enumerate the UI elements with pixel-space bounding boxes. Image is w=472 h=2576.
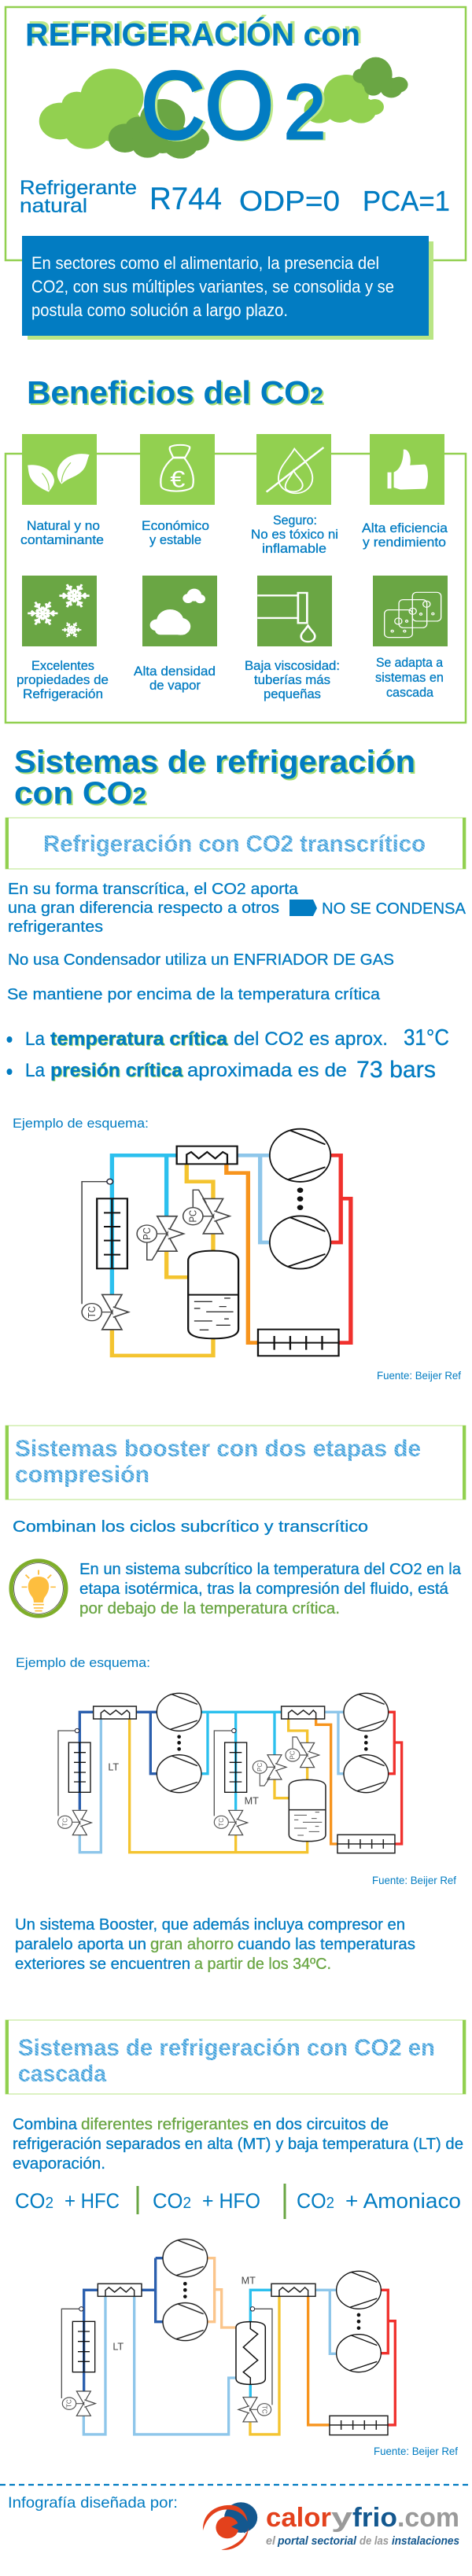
benefit labels: inflamable [262,541,326,556]
logo tagline: portal sectorial [277,2534,357,2548]
benefit labels: Económico [142,518,209,533]
heading box: cascade: Sistemas de refrigeración con CO2 en [18,2035,435,2061]
critical values list: del CO2 es aprox. [234,1029,388,1050]
icon: money bag: € [170,466,185,492]
icon: vapour clouds [150,589,205,635]
text: cascade description: evaporación. [13,2155,105,2173]
benefit labels: Refrigeración [23,686,103,701]
valves: PC [256,1763,264,1772]
text: transcritical explanation: refrigerantes [8,918,103,936]
logo wordmark: .com [397,2503,459,2533]
heading: systems: con CO 2 [14,776,146,811]
icon: thumbs up [388,449,428,490]
icon: cascade units [385,592,441,638]
icon: light bulb [11,1561,66,1616]
heat exchangers [94,1706,325,1719]
text: transcritical explanation: Se mantiene por encima de la temperatura crítica [7,986,381,1003]
logo: caloryfrio [203,2502,459,2550]
text: cascade description [13,2116,463,2173]
benefit labels: y rendimiento [363,535,446,550]
text: cascade description: Combina [13,2116,78,2133]
benefit labels: Baja viscosidad: [245,658,340,673]
receiver [188,1251,238,1338]
labels LT MT [108,1762,259,1807]
critical values list: temperatura crítica [50,1029,228,1050]
labels LT MT: MT [245,1796,259,1807]
valves: TC [61,1818,68,1827]
credit text: Infografía diseñada por: [8,2495,178,2512]
heading box: cascade [6,2020,466,2094]
icon: money bag [160,445,194,492]
text: booster savings: a partir de los 34ºC. [194,1956,331,1973]
benefit labels: tuberías más [254,672,330,687]
valves: PC [141,1227,153,1240]
heading box: cascade: cascada [18,2061,106,2087]
text: transcritical explanation [7,881,466,1003]
text: transcritical explanation: una gran diferencia respecto a otros [8,900,279,917]
heading box: booster: Sistemas booster con dos etapas de [15,1436,421,1462]
labels LT MT: MT [242,2275,256,2286]
text: subcritical note: por debajo de la temperatura crítica. [79,1600,340,1617]
valves: TC [218,1818,225,1827]
text: transcritical explanation: En su forma transcrítica, el CO2 aporta [8,881,299,898]
valves [82,1190,230,1330]
critical values list [6,1025,449,1083]
text: booster savings: paralelo aporta un [15,1936,146,1953]
logo icon [203,2502,257,2550]
benefit labels: No es tóxico ni [251,527,338,542]
text: cascade description: diferentes refrigerantes [81,2116,249,2133]
critical values list: presión crítica [50,1060,183,1081]
evaporator [72,2321,95,2372]
evaporator [97,1198,127,1268]
heading box: booster [6,1426,466,1500]
benefit labels: Seguro: [273,513,317,528]
refrigerant pairs: + HFO [202,2189,260,2213]
refrigerant pairs: CO2 [153,2189,191,2213]
title: REFRIGERACIÓN con [25,17,360,53]
diagram: booster [58,1693,402,1853]
refrigerant pairs: CO2 [15,2189,53,2213]
panel: header [6,7,466,340]
diagram: cascade [61,2239,395,2435]
text: booster savings: exteriores se encuentren [15,1956,190,1973]
logo tagline [266,2534,459,2548]
text: subcritical note: En un sistema subcrítico la temperatura del CO2 en la [79,1561,462,1578]
source 1: Fuente: Beijer Ref [377,1369,461,1382]
text: cycles: Combinan los ciclos subcrítico y transcrítico [13,1518,368,1536]
evaporators [68,1742,247,1792]
title: CO2: 2 [284,68,326,155]
logo tagline: el [266,2534,276,2548]
icon: snowflakes [28,583,90,638]
valves [58,1737,319,1835]
gas cooler [330,2416,388,2435]
compressors [163,2239,381,2372]
labels LT MT: LT [112,2341,124,2352]
refrigerant facts: PCA=1 [363,185,450,217]
icon: no flame [267,447,323,493]
text: subcritical note: etapa isotérmica, tras la compresión del fluido, está [79,1581,449,1598]
compressors [157,1693,389,1793]
title: CO2: CO [141,52,274,159]
source 2: Fuente: Beijer Ref [372,1874,456,1886]
icon: pipe with drop [257,593,315,642]
critical values list: La [25,1029,46,1050]
caption: example 1: Ejemplo de esquema: [13,1116,149,1131]
refrigerant facts [20,177,450,217]
logo wordmark [266,2503,459,2533]
heading box: transcritical [6,818,466,869]
critical values list: aproximada es de [187,1060,347,1081]
critical values list: 73 bars [356,1057,436,1083]
logo tagline: de las [360,2534,389,2548]
heat exchangers [98,2283,315,2296]
intro text box: CO2, con sus múltiples variantes, se consolida y se [31,277,394,296]
logo wordmark: frio [352,2503,397,2533]
caption: example 2: Ejemplo de esquema: [16,1655,150,1670]
heading: systems: Sistemas de refrigeración [14,745,415,779]
text: booster savings: cuando las temperaturas [238,1936,415,1953]
benefit labels: sistemas en [375,670,444,685]
refrigerant facts: natural [20,195,87,217]
heading: systems [14,745,415,811]
benefit labels: de vapor [149,678,201,693]
benefit labels: y estable [149,532,201,547]
dashed footer line [0,2484,472,2486]
refrigerant facts: ODP=0 [239,185,340,217]
intro text box: postula como solución a largo plazo. [31,300,288,320]
benefit labels: Alta densidad [134,664,216,679]
arrow [289,900,317,916]
benefit labels: contaminante [20,532,104,547]
heat exchanger [177,1146,238,1164]
valves [62,2391,271,2422]
intro text box [22,236,433,340]
logo tagline: instalaciones [392,2534,459,2548]
text: subcritical note [79,1561,462,1617]
refrigerant pairs: CO2 [297,2189,334,2213]
valves: PC [187,1210,199,1223]
refrigerant facts: Refrigerante [20,177,137,199]
heading box: booster: compresión [15,1462,149,1488]
refrigerant facts: R744 [149,182,222,216]
cascade exchanger [236,2322,265,2384]
diagram: transcritical [82,1129,351,1356]
text: cascade description: en dos circuitos de [253,2116,389,2133]
intro text box: En sectores como el alimentario, la presencia del [31,253,379,273]
text: transcritical explanation: NO SE CONDENSA [322,900,466,918]
refrigerant pairs [15,2184,461,2219]
valves: PC [289,1750,297,1760]
critical values list: La [25,1060,46,1081]
receiver [289,1779,326,1842]
text: booster savings: Un sistema Booster, que además incluya compresor en [15,1916,405,1934]
benefit labels: cascada [386,685,434,700]
text: transcritical explanation: No usa Condensador utiliza un ENFRIADOR DE GAS [8,951,394,969]
text: booster savings: gran ahorro [150,1936,234,1953]
benefit labels: pequeñas [264,686,321,701]
gas cooler [337,1834,395,1853]
refrigerant pairs: + Amoniaco [345,2189,461,2213]
benefit labels: Natural y no [27,518,100,533]
text: cascade description: refrigeración separados en alta (MT) y baja temperatura (LT) de [13,2136,463,2153]
icon: clouds [39,57,408,159]
text: booster savings [15,1916,415,1973]
logo wordmark: y [331,2503,352,2533]
benefit labels: Se adapta a [376,655,443,670]
valves: TC [260,2405,267,2414]
benefits frame [6,454,466,723]
critical values list: 31°C [404,1025,449,1051]
compressors [270,1129,330,1269]
source 3: Fuente: Beijer Ref [374,2445,458,2457]
valves: TC [66,2399,73,2408]
header frame [6,7,466,260]
icon: leaves [28,454,90,492]
benefit labels: Alta eficiencia [362,521,448,535]
panel: benefits [6,434,466,723]
labels LT MT [112,2275,256,2352]
benefit labels: Excelentes [31,658,94,673]
gas cooler [258,1330,339,1356]
benefit labels [17,513,448,701]
heading box: transcritical: Refrigeración con CO2 transcrítico [43,831,426,857]
benefit labels: propiedades de [17,672,109,687]
refrigerant pairs: + HFC [65,2189,120,2213]
benefit tiles [22,434,448,646]
labels LT MT: LT [108,1762,119,1773]
valves: TC [86,1306,98,1318]
logo wordmark: calor [266,2503,331,2533]
icons: benefits [28,445,441,642]
heading: benefits: Beneficios del CO 2 [27,374,323,410]
